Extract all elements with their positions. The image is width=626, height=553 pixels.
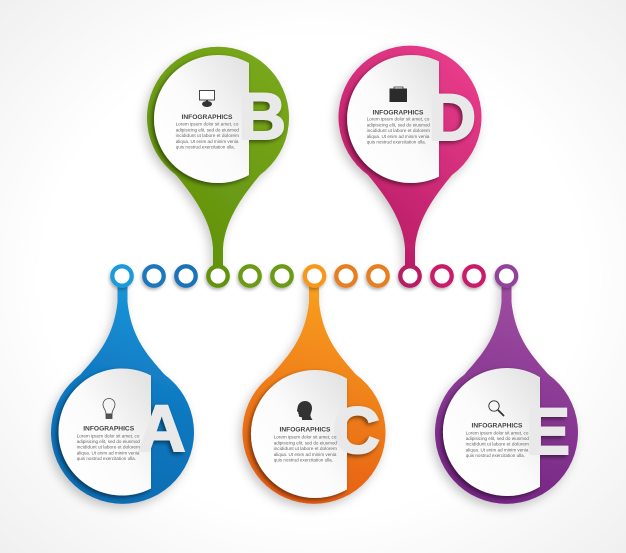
- paper disc with letter D: D: [428, 80, 476, 154]
- body text E: aliqua. Ut enim ad minim venia: [466, 447, 529, 452]
- paper disc with letter E: [443, 368, 570, 496]
- pin C: [242, 282, 386, 504]
- body text D: aliqua. Ut enim ad minim venia: [367, 134, 430, 139]
- panel: option C: [242, 266, 386, 504]
- paper disc with letter B: B: [238, 79, 286, 153]
- heading D: INFOGRAPHICS: [372, 109, 424, 116]
- body text A: Lorem ipsum dolor sit amet, co: [77, 433, 140, 438]
- connector rings row: [144, 266, 484, 286]
- pin E: [435, 282, 578, 504]
- paper disc with letter E: E: [526, 394, 570, 468]
- body text B: aliqua. Ut enim ad minim venia: [176, 139, 239, 144]
- ring D: [400, 266, 420, 286]
- body text B: [176, 122, 239, 150]
- body text C: adipisicing elit, sed do eiusmod: [274, 440, 337, 445]
- body text D: adipisicing elit, sed do eiusmod: [367, 122, 430, 127]
- icon: monitor: [200, 90, 214, 107]
- body text E: adipisicing elit, sed do eiusmod: [466, 436, 529, 441]
- body text A: quis nostrud exercitation ulla.: [77, 456, 136, 461]
- body text E: [466, 430, 529, 458]
- pin D: [338, 46, 482, 268]
- panel: option B: [147, 47, 289, 286]
- pin A: [51, 282, 194, 504]
- heading C: INFOGRAPHICS: [280, 427, 331, 434]
- icon: magnifier: [489, 401, 504, 416]
- ring B: [208, 266, 228, 286]
- paper disc with letter C: [251, 370, 380, 498]
- heading A: INFOGRAPHICS: [83, 425, 135, 432]
- heading B: INFOGRAPHICS: [182, 114, 233, 121]
- body text B: incididunt ut labore et dolorem: [176, 133, 239, 138]
- body text A: aliqua. Ut enim ad minim venia: [77, 450, 140, 455]
- body text E: Lorem ipsum dolor sit amet, co: [466, 430, 529, 435]
- panel: option A: [51, 266, 194, 504]
- paper disc with letter B: [154, 55, 286, 183]
- body text B: adipisicing elit, sed do eiusmod: [176, 127, 239, 132]
- paper disc with letter A: [59, 368, 186, 496]
- body text A: adipisicing elit, sed do eiusmod: [77, 439, 140, 444]
- body text D: Lorem ipsum dolor sit amet, co: [367, 117, 430, 122]
- heading E: INFOGRAPHICS: [472, 422, 523, 429]
- body text C: quis nostrud exercitation ulla.: [274, 458, 333, 462]
- body text E: quis nostrud exercitation ulla.: [466, 453, 525, 458]
- panel: option D: [338, 46, 482, 286]
- body text A: incididunt ut labore et dolorem: [77, 445, 140, 450]
- body text E: incididunt ut labore et dolorem: [466, 442, 529, 447]
- body text D: incididunt ut labore et dolorem: [367, 128, 430, 133]
- ring A: [112, 266, 132, 286]
- icon: head silhouette: [297, 401, 312, 420]
- icon: light bulb: [103, 399, 115, 418]
- body text B: quis nostrud exercitation ulla.: [176, 144, 235, 150]
- paper disc with letter C: C: [332, 393, 380, 467]
- ring C: [305, 266, 324, 286]
- body text D: [367, 117, 430, 144]
- body text D: quis nostrud exercitation ulla.: [367, 140, 426, 144]
- body text C: incididunt ut labore et dolorem: [274, 446, 337, 451]
- body text A: [77, 433, 140, 461]
- panel: option E: [435, 266, 578, 504]
- ring E: [497, 266, 516, 286]
- paper disc with letter A: A: [138, 391, 186, 465]
- icon: briefcase: [390, 87, 407, 102]
- body text C: aliqua. Ut enim ad minim venia: [274, 452, 337, 457]
- paper disc with letter D: [347, 55, 476, 183]
- body text C: [274, 435, 337, 462]
- body text B: Lorem ipsum dolor sit amet, co: [176, 122, 239, 127]
- body text C: Lorem ipsum dolor sit amet, co: [274, 435, 337, 440]
- pin B: [147, 47, 289, 268]
